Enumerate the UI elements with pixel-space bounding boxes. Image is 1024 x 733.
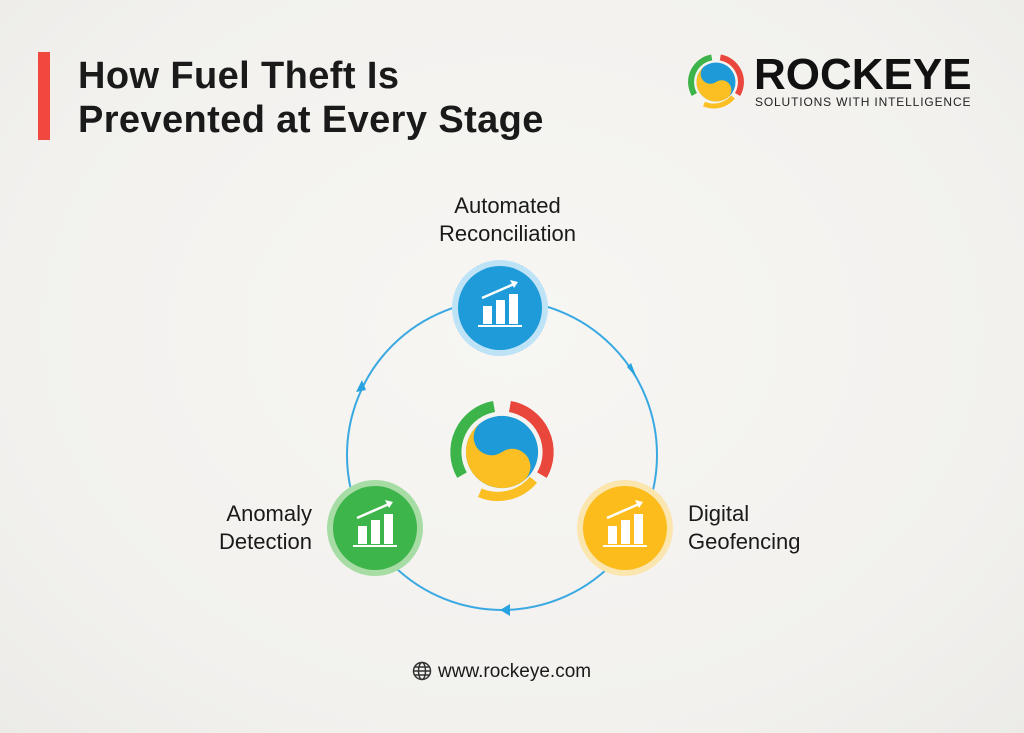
title	[78, 55, 544, 141]
footer website: www.rockeye.com	[438, 661, 591, 682]
label: automated reconciliation	[439, 193, 576, 246]
node: automated reconciliation	[452, 260, 548, 356]
node: anomaly detection	[327, 480, 423, 576]
label: digital geofencing	[688, 501, 801, 554]
cycle ring with arrows	[347, 300, 657, 616]
label: anomaly detection	[219, 501, 312, 554]
node: digital geofencing	[577, 480, 673, 576]
center logo	[452, 402, 552, 502]
brand logo	[688, 50, 972, 109]
label: automated reconciliation: Automated	[454, 193, 561, 218]
brand logo: ROCKEYE	[754, 50, 972, 99]
brand logo: SOLUTIONS WITH INTELLIGENCE	[755, 95, 971, 109]
label: digital geofencing: Geofencing	[688, 529, 801, 554]
label: anomaly detection: Detection	[219, 529, 312, 554]
label: automated reconciliation: Reconciliation	[439, 221, 576, 246]
label: digital geofencing: Digital	[688, 501, 749, 526]
title: How Fuel Theft Is	[78, 55, 399, 97]
title accent bar	[38, 52, 50, 140]
label: anomaly detection: Anomaly	[226, 501, 312, 526]
title: Prevented at Every Stage	[78, 99, 544, 141]
